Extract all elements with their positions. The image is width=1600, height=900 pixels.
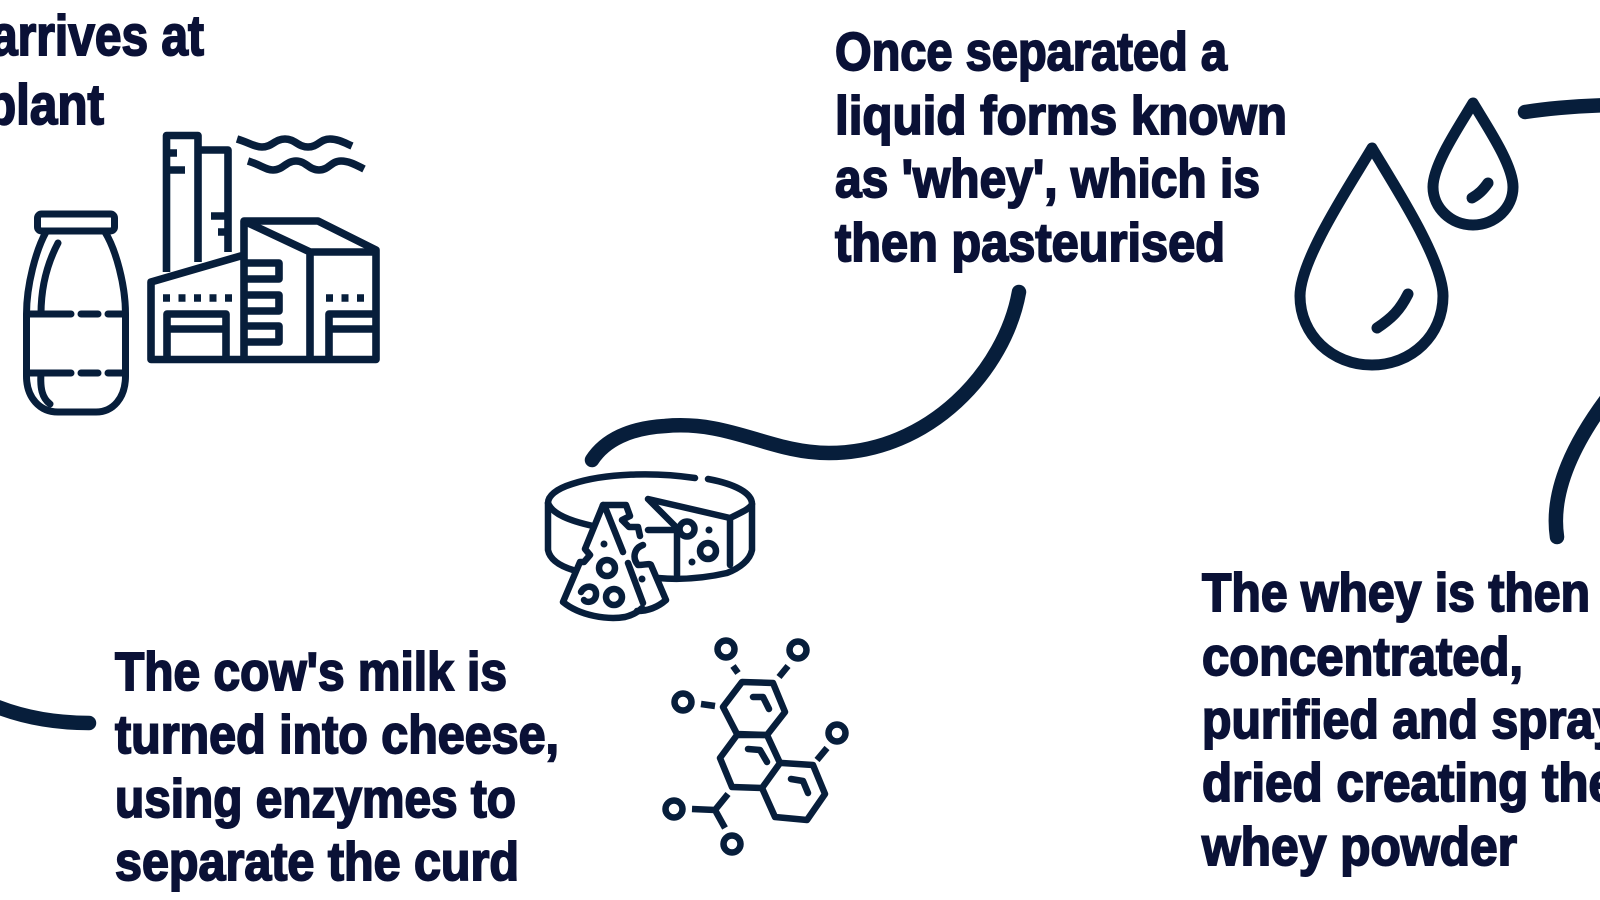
arrow: connector into whey powder text — [1556, 392, 1600, 537]
text: once separated: liquid forms known — [835, 86, 1287, 146]
text: whey concentrated: whey powder — [1201, 817, 1517, 877]
text: cow's milk into cheese — [115, 642, 559, 892]
icon: water drops — [1300, 103, 1513, 365]
icon: milk bottle — [26, 214, 126, 412]
text: once separated: then pasteurised — [835, 213, 1225, 273]
text: once separated — [835, 22, 1287, 273]
text: whey concentrated: concentrated, — [1202, 627, 1523, 687]
icon: molecule — [666, 640, 846, 852]
text: cow's milk into cheese: using enzymes to — [115, 769, 516, 829]
icon: cheese wheel and slices — [548, 474, 752, 618]
arrow: connector into cow's milk text — [0, 706, 89, 723]
text: cow's milk into cheese: The cow's milk is — [115, 642, 507, 702]
text: cow's milk into cheese: separate the curd — [115, 832, 519, 892]
text: once separated: as 'whey', which is — [835, 149, 1260, 209]
arrow: connector into drops — [1525, 105, 1600, 112]
arrow: connector from whey text to cheese — [592, 292, 1019, 460]
icon: factory with chimneys and smoke — [151, 136, 376, 360]
text: once separated: Once separated a — [835, 22, 1228, 82]
text: whey concentrated — [1201, 563, 1600, 877]
text: cow's milk into cheese: turned into cheese, — [115, 705, 559, 765]
text: milk arrives at plant — [0, 4, 204, 137]
